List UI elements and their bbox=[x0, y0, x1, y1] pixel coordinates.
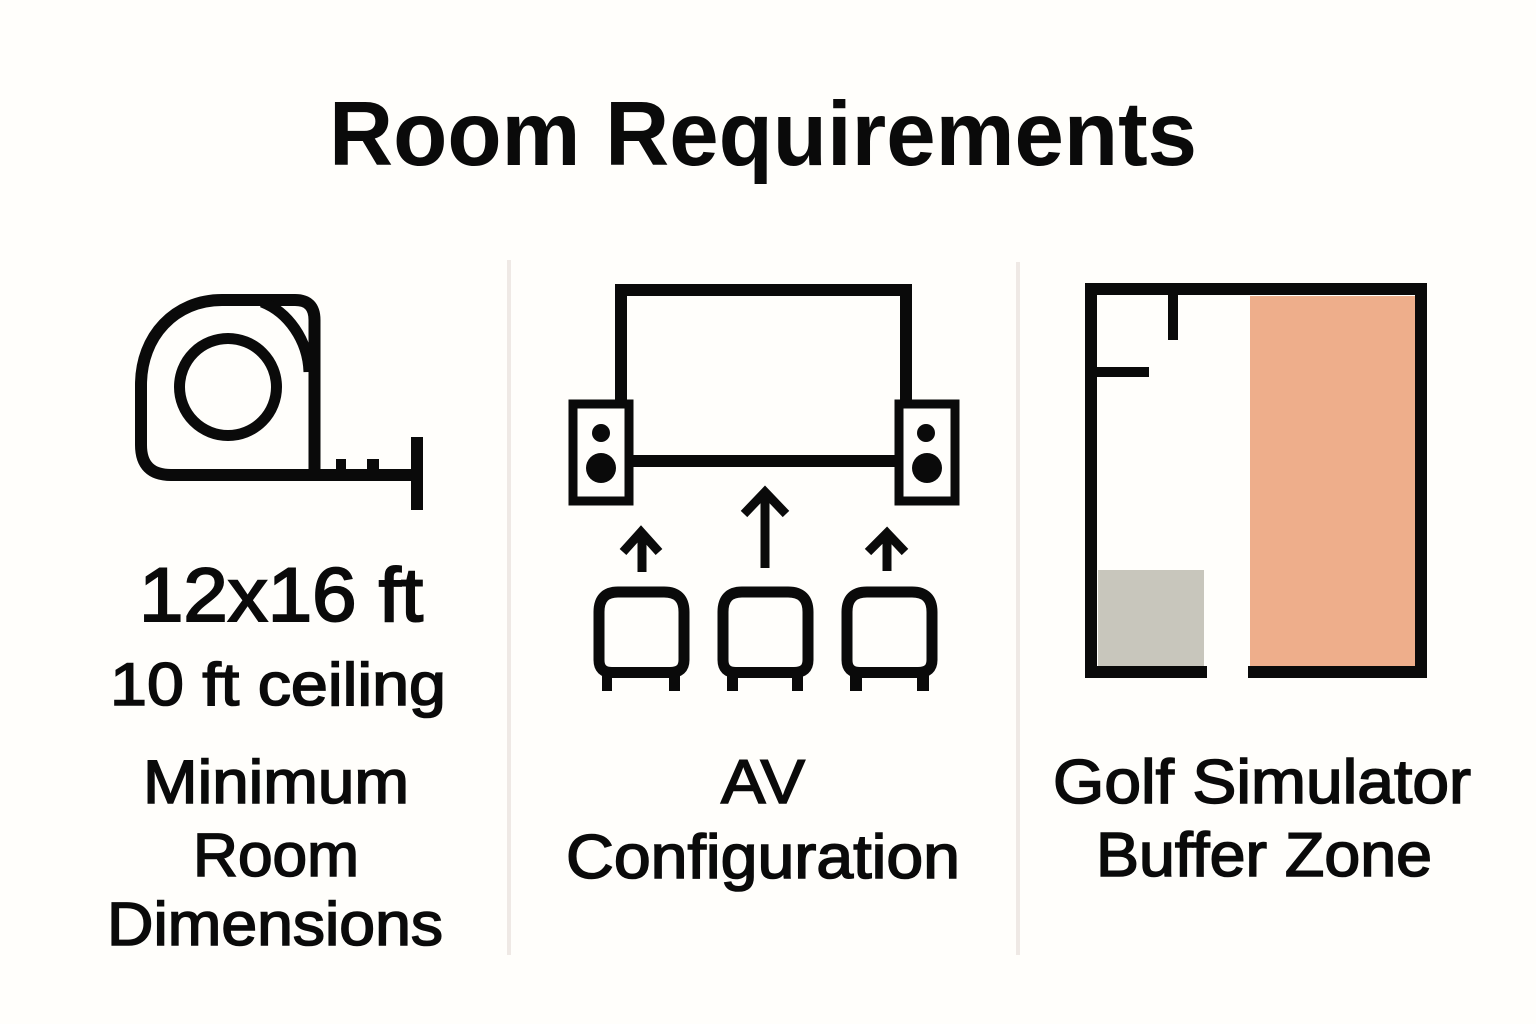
label: AV configuration bbox=[566, 748, 960, 892]
icon: right speaker bbox=[899, 404, 955, 501]
title: Room Requirements bbox=[329, 84, 1197, 185]
label: golf simulator buffer zone: Golf Simulator bbox=[1053, 748, 1471, 817]
seats bbox=[599, 592, 932, 672]
icon: left speaker bbox=[573, 404, 629, 501]
label: minimum room dimensions: Dimensions bbox=[107, 890, 443, 958]
label: AV configuration: Configuration bbox=[566, 823, 960, 892]
label: AV configuration: AV bbox=[721, 748, 806, 817]
arrows to screen bbox=[623, 492, 905, 572]
equipment zone fill bbox=[1098, 570, 1204, 666]
label: golf simulator buffer zone: Buffer Zone bbox=[1096, 821, 1432, 890]
panel: AV configuration bbox=[566, 290, 960, 892]
buffer zone fill bbox=[1250, 296, 1415, 666]
label: golf simulator buffer zone bbox=[1053, 748, 1471, 890]
label: minimum room dimensions: Minimum bbox=[143, 748, 409, 816]
label: minimum room dimensions: Room bbox=[193, 821, 359, 889]
ceiling height: 10 ft ceiling bbox=[110, 651, 446, 718]
icon: tape measure bbox=[141, 300, 417, 510]
label: minimum room dimensions bbox=[107, 748, 443, 958]
icon: screen bbox=[621, 290, 906, 461]
panel: golf simulator buffer zone bbox=[1053, 289, 1471, 890]
panel: minimum room dimensions bbox=[107, 300, 446, 958]
icon: floor plan walls bbox=[1091, 289, 1421, 672]
room size: 12x16 ft bbox=[139, 553, 423, 638]
